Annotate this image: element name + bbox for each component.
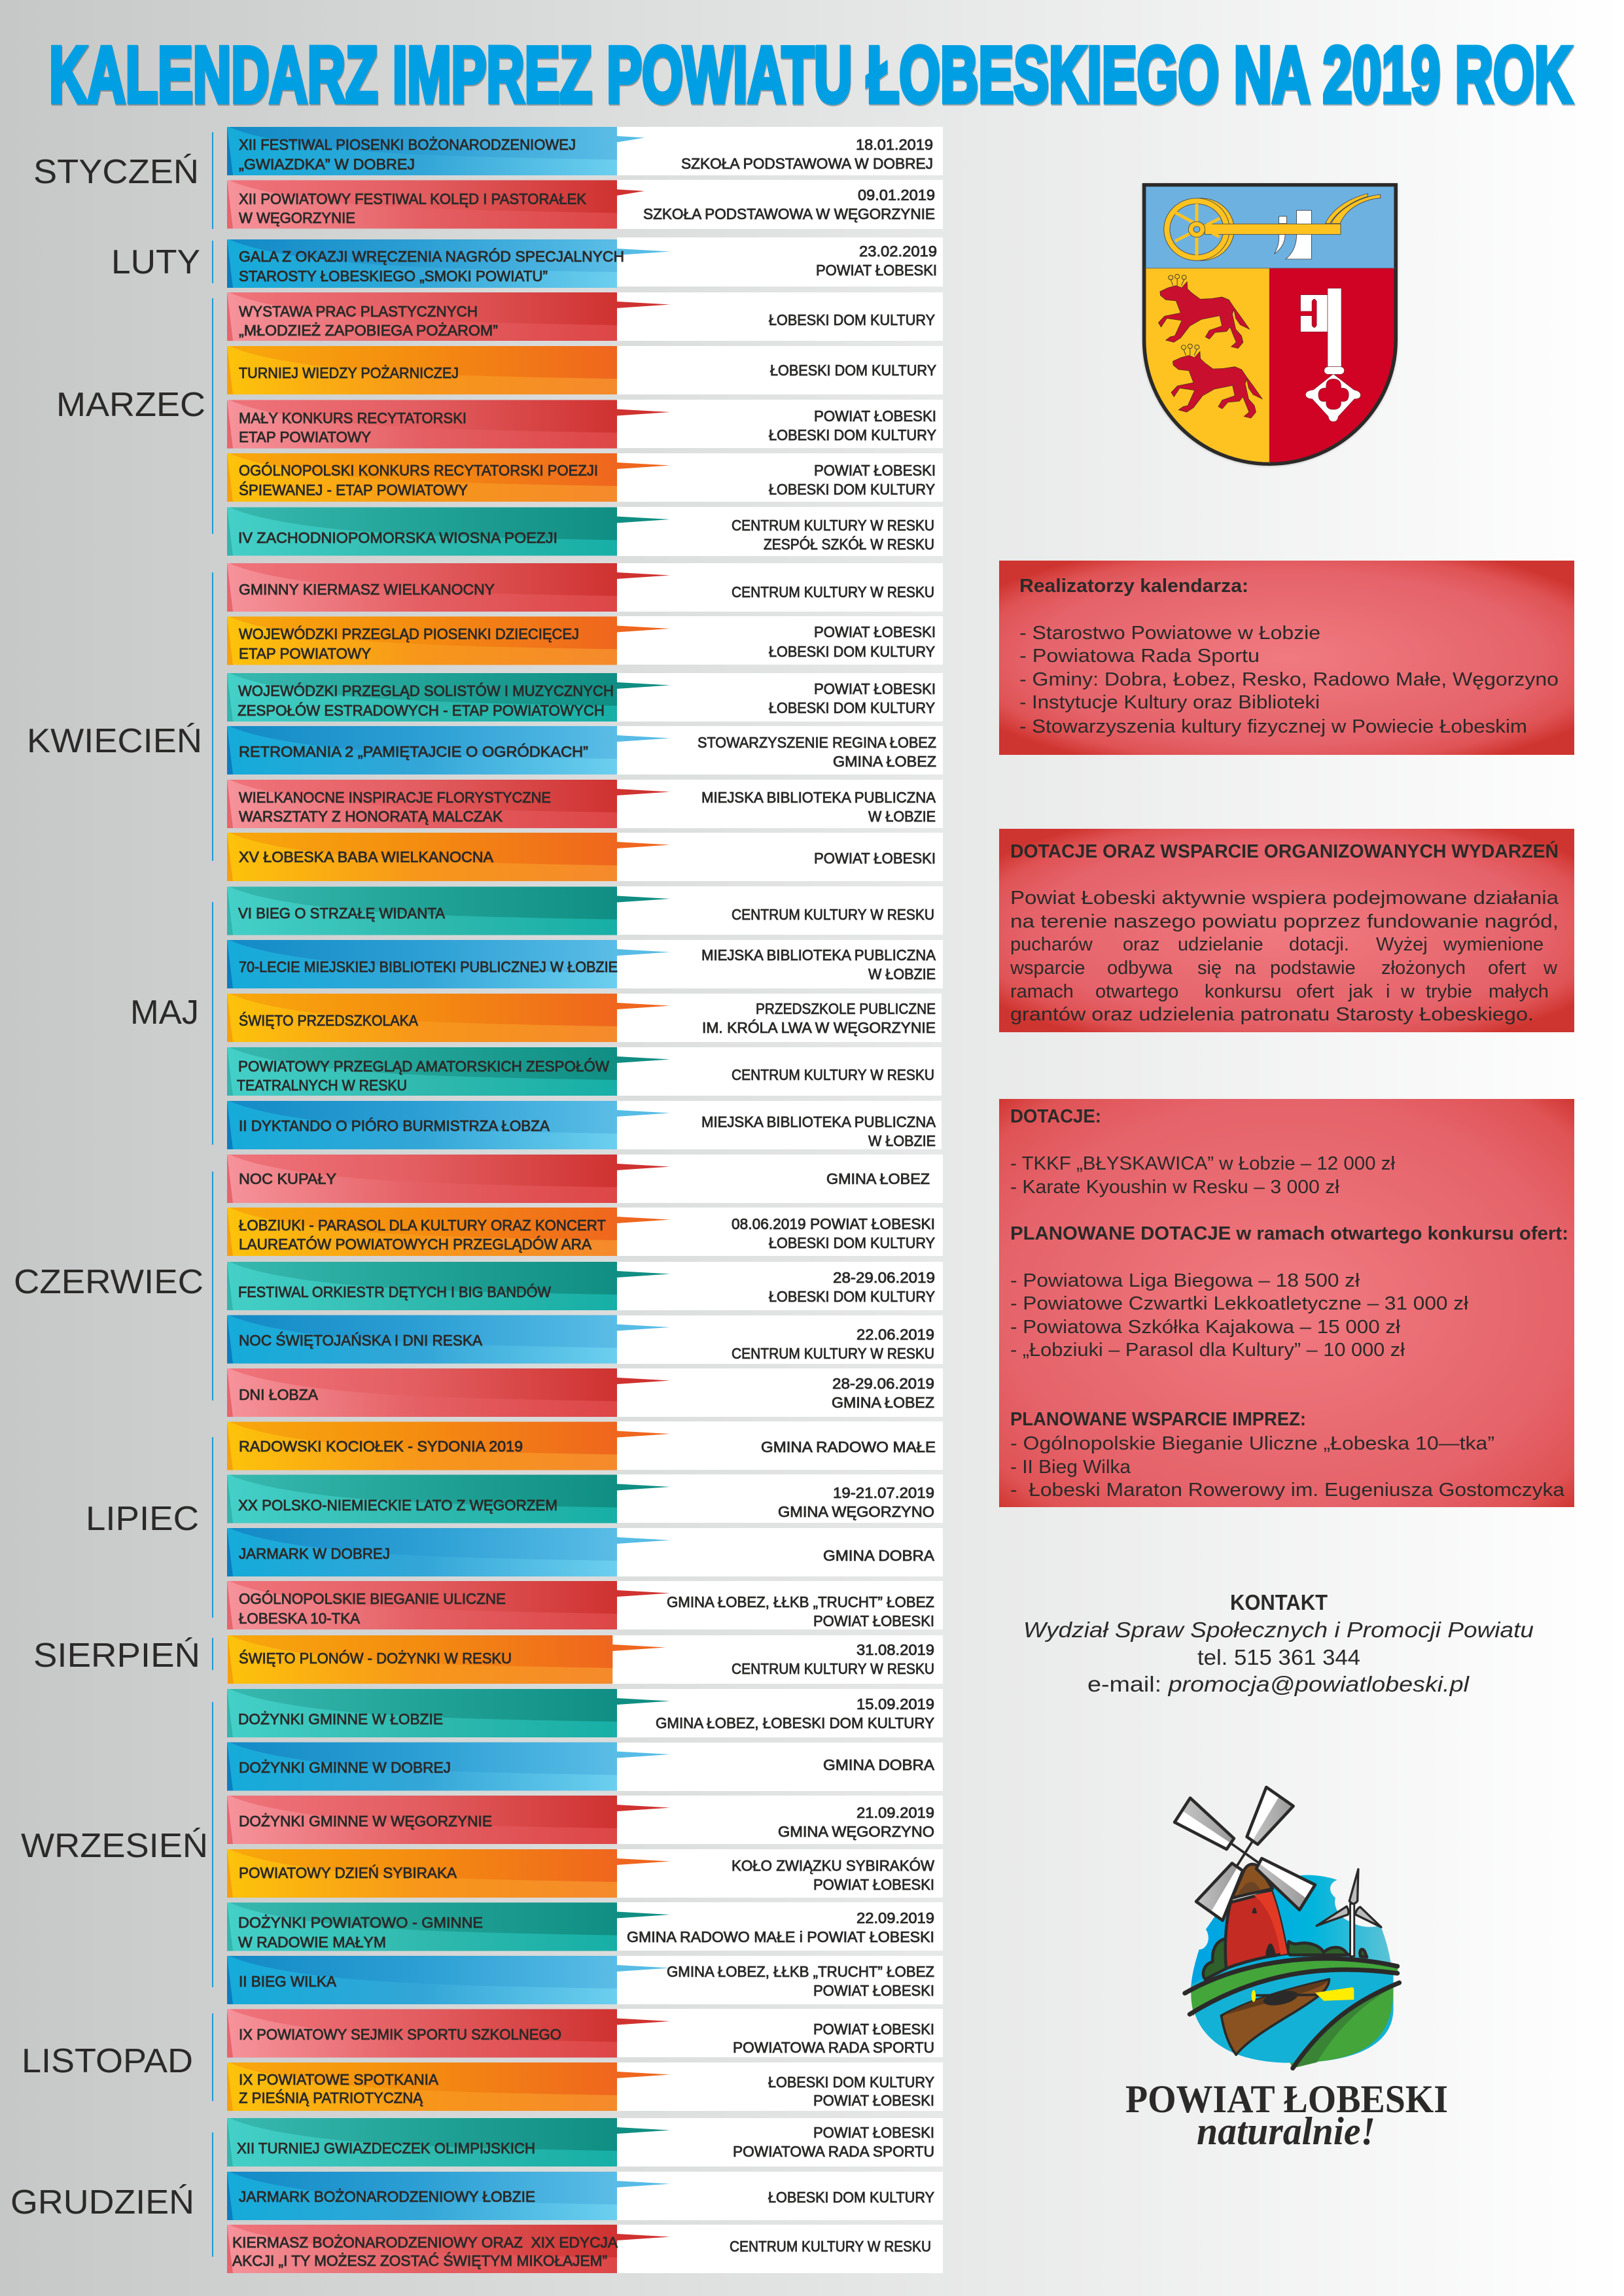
panel: dotacje: - Łobeski Maraton Rowerowy im. Eugeniusza Gostomczyka (1010, 1480, 1565, 1501)
plough (1164, 194, 1381, 260)
panel: dotacje: - Powiatowa Liga Biegowa – 18 500 zł (1010, 1270, 1360, 1291)
event row 29 (228, 1635, 943, 1684)
panel: dotacje oraz wsparcie: w (1543, 958, 1558, 979)
event row 10: ETAP POWIATOWY (239, 645, 371, 662)
event row 37 (227, 2062, 943, 2111)
event row 27: JARMARK W DOBREJ (239, 1545, 390, 1562)
contact block: Wydział Spraw Społecznych i Promocji Powiatu (1023, 1618, 1534, 1642)
event row 17: IM. KRÓLA LWA W WĘGORZYNIE (702, 1019, 936, 1036)
event row 24: GMINA ŁOBEZ (832, 1394, 934, 1411)
event row 33: POWIATOWY DZIEŃ SYBIRAKA (239, 1864, 457, 1881)
month: maj: MAJ (130, 994, 199, 1032)
event row 16: W ŁOBZIE (868, 965, 936, 983)
month: listopad: LISTOPAD (22, 2042, 193, 2080)
panel: dotacje oraz wsparcie: jak (1348, 981, 1373, 1002)
event row 23 (227, 1315, 943, 1364)
panel: dotacje: DOTACJE: (1010, 1106, 1101, 1127)
event row 13: W ŁOBZIE (868, 808, 936, 825)
event row 2: SZKOŁA PODSTAWOWA W WĘGORZYNIE (643, 205, 935, 222)
event row 6: ETAP POWIATOWY (239, 428, 371, 445)
contact block: KONTAKT (1230, 1590, 1328, 1614)
event row 7: POWIAT ŁOBESKI (814, 462, 936, 479)
event row 6: POWIAT ŁOBESKI (814, 408, 936, 425)
event row 1: SZKOŁA PODSTAWOWA W DOBREJ (681, 155, 933, 172)
panel: dotacje oraz wsparcie: udzielanie (1178, 934, 1263, 955)
event row 37: ŁOBESKI DOM KULTURY (768, 2074, 934, 2091)
event row 22: 28-29.06.2019 (833, 1269, 935, 1286)
event row 27 (227, 1528, 943, 1576)
panel: dotacje: - Powiatowe Czwartki Lekkoatletyczne – 31 000 zł (1010, 1293, 1469, 1314)
event row 30: 15.09.2019 (856, 1696, 934, 1713)
event row 33 (227, 1849, 943, 1898)
event row 35 (227, 1956, 943, 2004)
event row 31 (227, 1743, 943, 1791)
event row 4: ŁOBESKI DOM KULTURY (769, 311, 935, 328)
event row 21: 08.06.2019 POWIAT ŁOBESKI (732, 1215, 935, 1232)
event row 11: POWIAT ŁOBESKI (814, 680, 936, 697)
event row 12 (227, 726, 943, 774)
logo wordmark: POWIAT ŁOBESKI (1125, 2078, 1448, 2121)
event row 32: GMINA WĘGORZYNO (778, 1823, 934, 1840)
panel: dotacje oraz wsparcie: ofert (1296, 981, 1334, 1002)
event row 13 (227, 780, 943, 828)
event row 37: Z PIEŚNIĄ PATRIOTYCZNĄ (239, 2089, 423, 2106)
event row 25: GMINA RADOWO MAŁE (761, 1438, 936, 1455)
event row 26: XX POLSKO-NIEMIECKIE LATO Z WĘGORZEM (238, 1497, 557, 1514)
event row 31: GMINA DOBRA (823, 1756, 935, 1773)
event row 36: IX POWIATOWY SEJMIK SPORTU SZKOLNEGO (239, 2026, 561, 2043)
event row 5 (227, 346, 943, 394)
event row 8 (227, 507, 943, 556)
event row 8: ZESPÓŁ SZKÓŁ W RESKU (764, 536, 934, 553)
panel: dotacje oraz wsparcie: podstawie (1270, 958, 1356, 979)
event row 39: ŁOBESKI DOM KULTURY (768, 2189, 934, 2206)
event row 38: POWIAT ŁOBESKI (813, 2124, 934, 2141)
event row 31: DOŻYNKI GMINNE W DOBREJ (239, 1759, 451, 1776)
contact block: tel. 515 361 344 (1197, 1645, 1360, 1669)
event row 35: II BIEG WILKA (239, 1973, 337, 1990)
event row 1: 18.01.2019 (856, 136, 933, 153)
event row 40: KIERMASZ BOŻONARODZENIOWY ORAZ XIX EDYCJA (232, 2234, 618, 2251)
event row 20: NOC KUPAŁY (239, 1170, 336, 1187)
event row 15: CENTRUM KULTURY W RESKU (732, 906, 934, 923)
event row 26 (227, 1474, 943, 1523)
event row 30: DOŻYNKI GMINNE W ŁOBZIE (238, 1711, 443, 1728)
wolf (1158, 274, 1250, 349)
event row 10: ŁOBESKI DOM KULTURY (769, 643, 935, 660)
event row 6: MAŁY KONKURS RECYTATORSKI (239, 409, 467, 426)
event row 16 (227, 940, 943, 988)
event row 29: 31.08.2019 (856, 1641, 934, 1658)
event row 34: DOŻYNKI POWIATOWO - GMINNE (238, 1914, 483, 1931)
event row 9: CENTRUM KULTURY W RESKU (732, 583, 934, 600)
panel: dotacje: - Ogólnopolskie Bieganie Uliczne „Łobeska 10—tka” (1010, 1433, 1494, 1454)
month: sierpień: SIERPIEŃ (33, 1637, 200, 1675)
month: grudzień: GRUDZIEŃ (10, 2183, 194, 2221)
event row 19: W ŁOBZIE (868, 1132, 936, 1149)
event row 39 (227, 2172, 943, 2220)
panel: dotacje oraz wsparcie: pucharów (1010, 934, 1093, 955)
event row 3: POWIAT ŁOBESKI (816, 262, 937, 279)
event row 40 (227, 2225, 943, 2273)
event row 24: 28-29.06.2019 (832, 1375, 934, 1392)
event row 22: FESTIWAL ORKIESTR DĘTYCH I BIG BANDÓW (238, 1283, 551, 1300)
event row 19 (227, 1101, 942, 1149)
event row 23: NOC ŚWIĘTOJAŃSKA I DNI RESKA (239, 1331, 483, 1349)
event row 10 (227, 616, 943, 665)
panel: realizatorzy kalendarza: Realizatorzy kalendarza: (1019, 576, 1248, 597)
event row 34 (227, 1902, 943, 1951)
event row 14: POWIAT ŁOBESKI (814, 850, 936, 867)
event row 8: IV ZACHODNIOPOMORSKA WIOSNA POEZJI (238, 529, 557, 546)
event row 21: ŁOBESKI DOM KULTURY (769, 1234, 935, 1251)
event row 35: GMINA ŁOBEZ, ŁŁKB „TRUCHT” ŁOBEZ (667, 1963, 934, 1980)
event row 28: ŁOBESKA 10-TKA (239, 1610, 361, 1627)
panel: dotacje oraz wsparcie: otwartego (1095, 981, 1178, 1002)
month: lipiec: LIPIEC (86, 1500, 199, 1538)
panel: dotacje: - Powiatowa Szkółka Kajakowa – 15 000 zł (1010, 1317, 1401, 1338)
panel: dotacje: PLANOWANE WSPARCIE IMPREZ: (1010, 1409, 1306, 1430)
event row 34: GMINA RADOWO MAŁE i POWIAT ŁOBESKI (627, 1928, 934, 1945)
panel: dotacje oraz wsparcie (999, 829, 1574, 1032)
event row 24 (227, 1368, 943, 1417)
event row 23: 22.06.2019 (856, 1326, 934, 1343)
event row 22 (227, 1262, 943, 1310)
coat of arms (1144, 185, 1396, 464)
panel: dotacje (999, 1099, 1574, 1507)
event row 1: „GWIAZDKA” W DOBREJ (239, 156, 415, 173)
event row 17: ŚWIĘTO PRZEDSZKOLAKA (239, 1011, 419, 1029)
event row 36: POWIAT ŁOBESKI (813, 2021, 934, 2038)
event row 7: ŚPIEWANEJ - ETAP POWIATOWY (239, 481, 468, 498)
event row 3: GALA Z OKAZJI WRĘCZENIA NAGRÓD SPECJALNYCH (239, 248, 624, 265)
panel: dotacje oraz wsparcie: dotacji. (1289, 934, 1349, 955)
event row 21: LAUREATÓW POWIATOWYCH PRZEGLĄDÓW ARA (239, 1236, 592, 1253)
panel: dotacje: - II Bieg Wilka (1010, 1457, 1131, 1478)
event row 19: II DYKTANDO O PIÓRO BURMISTRZA ŁOBZA (239, 1117, 550, 1134)
panel: realizatorzy kalendarza: - Starostwo Powiatowe w Łobzie (1019, 623, 1320, 644)
panel: dotacje oraz wsparcie: się (1197, 958, 1222, 979)
event row 33: KOŁO ZWIĄZKU SYBIRAKÓW (732, 1857, 934, 1874)
event row 10: POWIAT ŁOBESKI (814, 623, 936, 640)
event row 25: RADOWSKI KOCIOŁEK - SYDONIA 2019 (239, 1438, 523, 1455)
panel: realizatorzy kalendarza: - Instytucje Kultury oraz Biblioteki (1019, 692, 1320, 713)
event row 12: RETROMANIA 2 „PAMIĘTAJCIE O OGRÓDKACH” (239, 743, 588, 760)
event row 14 (227, 833, 943, 881)
event row 35: POWIAT ŁOBESKI (813, 1982, 934, 1999)
event row 13: WIELKANOCNE INSPIRACJE FLORYSTYCZNE (239, 789, 551, 806)
event row 20: GMINA ŁOBEZ (826, 1170, 930, 1187)
event row 32: 21.09.2019 (856, 1804, 934, 1821)
panel: dotacje oraz wsparcie: na (1235, 958, 1256, 979)
event row 17 (227, 994, 942, 1042)
event row 37: IX POWIATOWE SPOTKANIA (239, 2071, 439, 2088)
event row 19: MIEJSKA BIBLIOTEKA PUBLICZNA (701, 1113, 936, 1130)
event row 2 (227, 180, 943, 229)
event row 15 (227, 886, 943, 935)
event row 8: CENTRUM KULTURY W RESKU (732, 517, 934, 534)
panel: realizatorzy kalendarza (999, 561, 1574, 755)
month: kwiecień: KWIECIEŃ (27, 722, 202, 760)
panel: dotacje oraz wsparcie: w (1400, 981, 1415, 1002)
key (1301, 288, 1361, 422)
panel: dotacje oraz wsparcie: ramach (1010, 981, 1074, 1002)
panel: dotacje oraz wsparcie: małych (1489, 981, 1549, 1002)
event row 38: POWIATOWA RADA SPORTU (733, 2143, 934, 2160)
panel: dotacje oraz wsparcie: trybie (1426, 981, 1472, 1002)
event row 14: XV ŁOBESKA BABA WIELKANOCNA (239, 848, 494, 865)
panel: dotacje oraz wsparcie: oraz (1123, 934, 1159, 955)
month: wrzesień: WRZESIEŃ (21, 1827, 208, 1865)
event row 5: ŁOBESKI DOM KULTURY (770, 362, 936, 379)
event row 40: AKCJI „I TY MOŻESZ ZOSTAĆ ŚWIĘTYM MIKOŁAJEM” (232, 2252, 607, 2269)
event row 24: DNI ŁOBZA (239, 1386, 319, 1403)
event row 28: OGÓLNOPOLSKIE BIEGANIE ULICZNE (239, 1590, 506, 1607)
event row 39: JARMARK BOŻONARODZENIOWY ŁOBZIE (239, 2188, 535, 2205)
event row 4 (227, 292, 943, 341)
logo wordmark (1125, 2078, 1448, 2153)
event row 30: GMINA ŁOBEZ, ŁOBESKI DOM KULTURY (656, 1714, 934, 1731)
event row 23: CENTRUM KULTURY W RESKU (732, 1345, 934, 1362)
event row 34: 22.09.2019 (856, 1909, 934, 1926)
event row 11: WOJEWÓDZKI PRZEGLĄD SOLISTÓW I MUZYCZNYCH (238, 682, 614, 699)
event row 13: MIEJSKA BIBLIOTEKA PUBLICZNA (701, 789, 936, 806)
event row 21 (227, 1208, 943, 1256)
panel: dotacje: - Karate Kyoushin w Resku – 3 000 zł (1010, 1177, 1340, 1198)
event row 28 (227, 1581, 943, 1629)
event row 11: ŁOBESKI DOM KULTURY (769, 699, 935, 716)
event row 36: POWIATOWA RADA SPORTU (733, 2039, 934, 2056)
event row 26: 19-21.07.2019 (833, 1484, 934, 1501)
panel: dotacje oraz wsparcie: konkursu (1205, 981, 1282, 1002)
event row 29: ŚWIĘTO PLONÓW - DOŻYNKI W RESKU (239, 1649, 512, 1667)
panel: dotacje oraz wsparcie: DOTACJE ORAZ WSPARCIE ORGANIZOWANYCH WYDARZEŃ (1010, 840, 1559, 862)
month: czerwiec: CZERWIEC (14, 1263, 203, 1301)
event row 20 (227, 1155, 943, 1203)
event row 25 (227, 1421, 943, 1470)
panel: dotacje oraz wsparcie: grantów oraz udzielenia patronatu Starosty Łobeskiego. (1010, 1004, 1534, 1025)
event row 9 (227, 563, 943, 612)
event row 34: W RADOWIE MAŁYM (238, 1934, 386, 1951)
event row 17: PRZEDSZKOLE PUBLICZNE (756, 1000, 936, 1017)
panel: dotacje oraz wsparcie: wymienione (1443, 934, 1544, 955)
panel: dotacje oraz wsparcie: Wyżej (1376, 934, 1428, 955)
event row 1 (227, 127, 943, 175)
event row 21: ŁOBZIUKI - PARASOL DLA KULTURY ORAZ KONCERT (239, 1217, 606, 1234)
month: styczeń: STYCZEŃ (33, 153, 199, 191)
event row 33: POWIAT ŁOBESKI (813, 1876, 934, 1893)
event row 4: WYSTAWA PRAC PLASTYCZNYCH (239, 303, 478, 320)
event row 22: ŁOBESKI DOM KULTURY (769, 1288, 935, 1305)
event row 2: 09.01.2019 (858, 186, 935, 203)
event row 12: STOWARZYSZENIE REGINA ŁOBEZ (697, 734, 936, 751)
event row 18: TEATRALNYCH W RESKU (237, 1077, 407, 1094)
panel: dotacje oraz wsparcie: wsparcie (1010, 958, 1085, 979)
panel: dotacje oraz wsparcie: złożonych (1381, 958, 1466, 979)
event row 6: ŁOBESKI DOM KULTURY (769, 426, 936, 444)
panel: dotacje: - TKKF „BŁYSKAWICA” w Łobzie – 12 000 zł (1010, 1153, 1396, 1174)
event row 11 (227, 673, 943, 722)
event row 3 (227, 237, 943, 288)
event row 32 (227, 1796, 943, 1844)
event row 12: GMINA ŁOBEZ (833, 753, 936, 770)
event row 5: TURNIEJ WIEDZY POŻARNICZEJ (239, 364, 459, 381)
panel: dotacje oraz wsparcie: ofert (1488, 958, 1526, 979)
event row 32: DOŻYNKI GMINNE W WĘGORZYNIE (239, 1813, 492, 1830)
event row 29: CENTRUM KULTURY W RESKU (732, 1660, 934, 1677)
event row 13: WARSZTATY Z HONORATĄ MALCZAK (239, 808, 503, 825)
logo wordmark: naturalnie! (1197, 2110, 1375, 2153)
event row 3: STAROSTY ŁOBESKIEGO „SMOKI POWIATU” (239, 268, 548, 285)
contact block: e-mail: promocja@powiatlobeski.pl (1087, 1672, 1470, 1696)
event row 16: MIEJSKA BIBLIOTEKA PUBLICZNA (701, 947, 936, 964)
panel: dotacje oraz wsparcie: na terenie naszego powiatu poprzez fundowanie nagród, (1010, 911, 1559, 932)
event row 40: CENTRUM KULTURY W RESKU (730, 2238, 931, 2255)
event row 37: POWIAT ŁOBESKI (813, 2092, 934, 2109)
panel: realizatorzy kalendarza: - Gminy: Dobra, Łobez, Resko, Radowo Małe, Węgorzyno (1019, 669, 1559, 690)
event row 2: W WĘGORZYNIE (239, 209, 355, 226)
panel: realizatorzy kalendarza: - Stowarzyszenia kultury fizycznej w Powiecie Łobeskim (1019, 716, 1527, 737)
event row 9: GMINNY KIERMASZ WIELKANOCNY (239, 581, 495, 598)
event row 4: „MŁODZIEŻ ZAPOBIEGA POŻAROM” (239, 322, 498, 339)
panel: dotacje oraz wsparcie: odbywa (1107, 958, 1173, 979)
event row 36 (227, 2009, 943, 2058)
event row 28: GMINA ŁOBEZ, ŁŁKB „TRUCHT” ŁOBEZ (667, 1593, 934, 1610)
panel: dotacje oraz wsparcie: i (1386, 981, 1390, 1002)
event row 18 (227, 1047, 942, 1096)
event row 16: 70-LECIE MIEJSKIEJ BIBLIOTEKI PUBLICZNEJ W ŁOBZIE (239, 958, 618, 975)
panel: dotacje: - „Łobziuki – Parasol dla Kultury” – 10 000 zł (1010, 1340, 1405, 1361)
event row 38: XII TURNIEJ GWIAZDECZEK OLIMPIJSKICH (237, 2140, 535, 2157)
event row 18: CENTRUM KULTURY W RESKU (732, 1066, 934, 1083)
event row 7: OGÓLNOPOLSKI KONKURS RECYTATORSKI POEZJI (239, 462, 598, 479)
event row 6 (227, 400, 943, 449)
event row 18: POWIATOWY PRZEGLĄD AMATORSKICH ZESPOŁÓW (238, 1058, 609, 1075)
event row 7 (227, 453, 943, 502)
event row 2: XII POWIATOWY FESTIWAL KOLĘD I PASTORAŁEK (239, 190, 587, 207)
contact block (1023, 1590, 1534, 1696)
logo: windmill (1174, 1787, 1400, 2068)
event row 3: 23.02.2019 (859, 243, 937, 260)
event row 1: XII FESTIWAL PIOSENKI BOŻONARODZENIOWEJ (239, 136, 576, 153)
event row 15: VI BIEG O STRZAŁĘ WIDANTA (238, 905, 446, 922)
month: luty: LUTY (111, 243, 200, 281)
event row 27: GMINA DOBRA (823, 1547, 935, 1564)
event row 26: GMINA WĘGORZYNO (778, 1503, 934, 1520)
event row 7: ŁOBESKI DOM KULTURY (769, 481, 935, 498)
event row 30 (227, 1689, 943, 1737)
event row 11: ZESPOŁÓW ESTRADOWYCH - ETAP POWIATOWYCH (238, 702, 605, 719)
month: marzec: MARZEC (56, 386, 205, 424)
panel: dotacje oraz wsparcie: Powiat Łobeski aktywnie wspiera podejmowane działania (1010, 888, 1559, 909)
panel: realizatorzy kalendarza: - Powiatowa Rada Sportu (1019, 646, 1260, 667)
event row 10: WOJEWÓDZKI PRZEGLĄD PIOSENKI DZIECIĘCEJ (239, 625, 579, 642)
event row 38 (227, 2118, 943, 2166)
panel: dotacje: PLANOWANE DOTACJE w ramach otwartego konkursu ofert: (1010, 1223, 1568, 1244)
event row 28: POWIAT ŁOBESKI (813, 1612, 934, 1629)
